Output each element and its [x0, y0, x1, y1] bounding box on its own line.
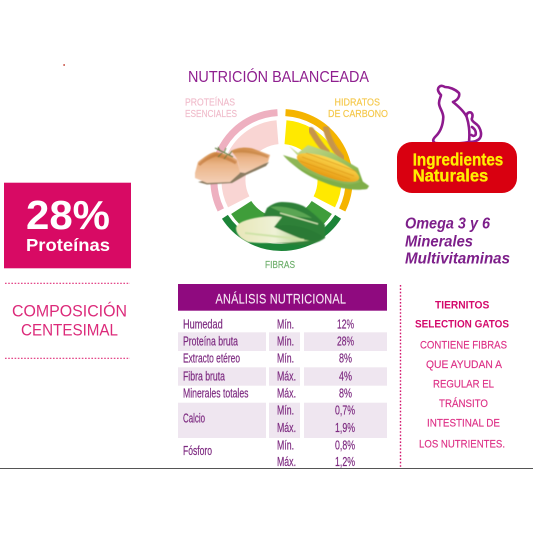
table values: 12%	[337, 316, 354, 331]
table min max column: Mín.	[277, 437, 294, 452]
table nutrient names: Fósforo	[183, 443, 212, 458]
table nutrient names: Humedad	[183, 316, 223, 331]
table header: ANÁLISIS NUTRICIONAL	[216, 290, 346, 307]
text block: tiernitos selection gatos: QUE AYUDAN A	[426, 359, 503, 371]
text block: tiernitos selection gatos: TRÁNSITO	[439, 397, 488, 410]
table min max column: Máx.	[277, 454, 296, 469]
text block: tiernitos selection gatos: INTESTINAL DE	[427, 417, 500, 429]
table values: 1,2%	[335, 454, 355, 469]
table nutrient names: Fibra bruta	[183, 368, 226, 383]
text block: tiernitos selection gatos: SELECTION GATOS	[415, 319, 509, 331]
label: hidratos de carbono: HIDRATOS	[334, 98, 380, 109]
text block: tiernitos selection gatos: REGULAR EL	[433, 378, 494, 390]
table min max column: Mín.	[277, 351, 294, 366]
table header	[178, 284, 387, 311]
panel: 28% proteínas: 28%	[26, 192, 110, 238]
stray mark	[64, 64, 65, 66]
title: NUTRICIÓN BALANCEADA	[188, 69, 370, 86]
table nutrient names: Proteína bruta	[183, 333, 239, 348]
table nutrient names: Calcio	[183, 410, 205, 425]
list: supplements: Minerales	[405, 234, 473, 251]
heading: composición centesimal: CENTESIMAL	[21, 321, 118, 340]
label: proteínas esenciales: ESENCIALES	[185, 109, 237, 120]
list: supplements	[405, 215, 510, 267]
table: análisis nutricional	[178, 284, 387, 469]
label: hidratos de carbono: DE CARBONO	[328, 109, 388, 120]
list: supplements: Multivitaminas	[405, 250, 510, 267]
icon: wheat ears	[311, 128, 342, 158]
table min max column: Máx.	[277, 386, 296, 401]
text block: tiernitos selection gatos	[415, 299, 509, 450]
table values: 0,8%	[335, 437, 355, 452]
table values	[335, 316, 355, 469]
table values: 1,9%	[335, 420, 355, 435]
donut chart: nutrition balance	[214, 113, 349, 248]
table nutrient names	[183, 316, 249, 458]
table min max column	[277, 316, 296, 469]
text block: tiernitos selection gatos: TIERNITOS	[435, 299, 489, 311]
table min max column: Mín.	[277, 402, 294, 417]
label: proteínas esenciales	[185, 96, 237, 120]
heading: composición centesimal	[12, 302, 127, 340]
table nutrient names: Minerales totales	[183, 386, 249, 401]
icon: cat outline	[433, 86, 481, 144]
badge: ingredientes naturales	[397, 142, 517, 193]
table min max column: Mín.	[277, 316, 294, 331]
table values: 8%	[339, 351, 352, 366]
table nutrient names: Extracto etéreo	[183, 351, 240, 366]
icon: corn cob	[283, 145, 369, 190]
table values: 8%	[339, 386, 352, 401]
icon: bok choy	[236, 202, 325, 245]
badge: ingredientes naturales: Ingredientes	[413, 150, 504, 170]
panel: 28% proteínas	[4, 183, 131, 268]
panel: 28% proteínas: Proteínas	[26, 235, 110, 255]
table values: 4%	[339, 368, 352, 383]
text block: tiernitos selection gatos: CONTIENE FIBRAS	[420, 339, 507, 351]
heading: composición centesimal: COMPOSICIÓN	[12, 302, 127, 321]
list: supplements: Omega 3 y 6	[405, 215, 490, 232]
table row bands	[178, 332, 387, 438]
label: fibras: FIBRAS	[265, 260, 295, 271]
table min max column: Máx.	[277, 420, 296, 435]
label: proteínas esenciales: PROTEÍNAS	[185, 96, 235, 109]
badge: ingredientes naturales: Naturales	[413, 166, 489, 186]
table min max column: Máx.	[277, 368, 296, 383]
table values: 0,7%	[335, 402, 355, 417]
icon: salmon fillet	[195, 147, 270, 184]
text block: tiernitos selection gatos: LOS NUTRIENTES.	[419, 438, 505, 450]
table values: 28%	[337, 333, 354, 348]
label: hidratos de carbono	[328, 98, 388, 120]
table min max column: Mín.	[277, 333, 294, 348]
